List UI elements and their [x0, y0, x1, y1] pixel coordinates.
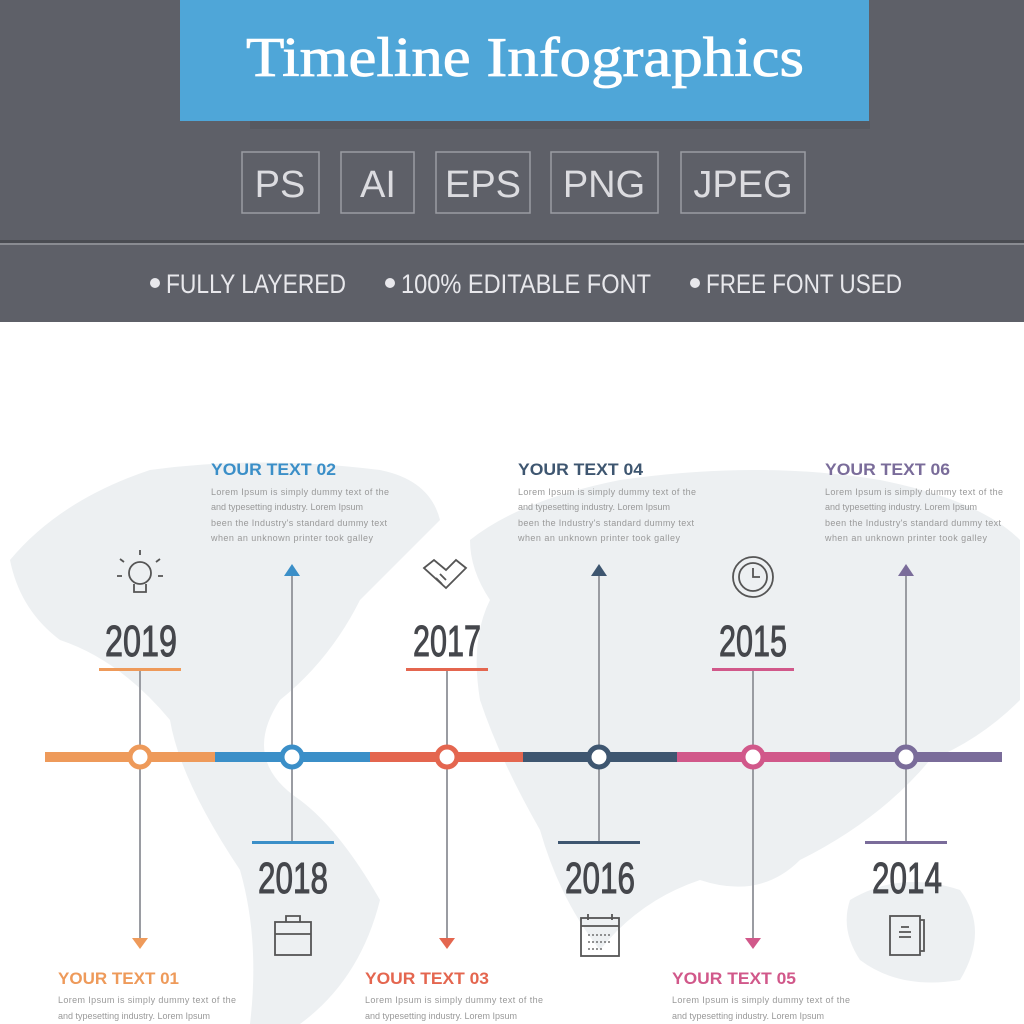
item 2016 [558, 564, 640, 956]
text block 02: YOUR TEXT 02 [211, 460, 336, 479]
text block 06: and typesetting industry. Lorem Ipsum [825, 502, 977, 512]
item 2016: 2016 [565, 854, 635, 903]
item 2015 [712, 557, 794, 949]
format badges: JPEG [693, 164, 793, 206]
text block 05 [672, 969, 850, 1021]
text block 04: Lorem Ipsum is simply dummy text of the [518, 487, 696, 497]
text block 06: Lorem Ipsum is simply dummy text of the [825, 487, 1003, 497]
title banner: Timeline Infographics [246, 27, 804, 89]
icon: briefcase [275, 916, 311, 955]
item 2015: 2015 [719, 617, 787, 666]
icon: handshake [424, 560, 466, 588]
text block 05: and typesetting industry. Lorem Ipsum [672, 1011, 824, 1021]
text block 04: been the Industry's standard dummy text [518, 518, 694, 528]
feature bullets: FREE FONT USED [706, 269, 902, 299]
text block 01: YOUR TEXT 01 [58, 969, 179, 988]
text block 01: and typesetting industry. Lorem Ipsum [58, 1011, 210, 1021]
text block 04: YOUR TEXT 04 [518, 460, 644, 479]
text block 04: and typesetting industry. Lorem Ipsum [518, 502, 670, 512]
item 2019: 2019 [105, 617, 177, 666]
text block 04: when an unknown printer took galley [517, 533, 680, 543]
item 2014 [865, 564, 947, 955]
format badges: PNG [563, 164, 645, 206]
format badges [242, 152, 805, 213]
text block 06 [824, 460, 1003, 543]
text block 05: Lorem Ipsum is simply dummy text of the [672, 995, 850, 1005]
item 2017 [406, 560, 488, 949]
format badges: EPS [445, 164, 521, 206]
item 2018 [252, 564, 334, 955]
text block 02: been the Industry's standard dummy text [211, 518, 387, 528]
text block 03: Lorem Ipsum is simply dummy text of the [365, 995, 543, 1005]
text block 01: Lorem Ipsum is simply dummy text of the [58, 995, 236, 1005]
item 2014: 2014 [872, 854, 942, 903]
text block 02: when an unknown printer took galley [210, 533, 374, 543]
text block 05: YOUR TEXT 05 [672, 969, 796, 988]
format badges: PS [255, 164, 305, 206]
icon: light bulb [117, 550, 163, 592]
icon: notebook [890, 916, 924, 955]
title banner [180, 0, 870, 129]
text block 01 [58, 969, 236, 1021]
text block 02: Lorem Ipsum is simply dummy text of the [211, 487, 389, 497]
header background [0, 0, 1024, 322]
item 2019 [99, 550, 181, 949]
text block 02: and typesetting industry. Lorem Ipsum [211, 502, 363, 512]
text block 04 [517, 460, 696, 543]
feature bullets: 100% EDITABLE FONT [401, 269, 651, 299]
text block 03: and typesetting industry. Lorem Ipsum [365, 1011, 517, 1021]
icon: calendar [581, 914, 619, 956]
item 2018: 2018 [258, 854, 328, 903]
text block 03 [365, 969, 543, 1021]
text block 06: when an unknown printer took galley [824, 533, 988, 543]
feature bullets: FULLY LAYERED [166, 269, 346, 299]
text block 03: YOUR TEXT 03 [365, 969, 489, 988]
text block 06: been the Industry's standard dummy text [825, 518, 1001, 528]
timeline bar [45, 752, 1002, 762]
text block 02 [210, 460, 389, 543]
format badges: AI [360, 164, 396, 206]
feature bullets [150, 269, 902, 299]
icon: clock [733, 557, 773, 597]
item 2017: 2017 [413, 617, 481, 666]
world map background [10, 462, 1020, 1024]
text block 06: YOUR TEXT 06 [825, 460, 950, 479]
